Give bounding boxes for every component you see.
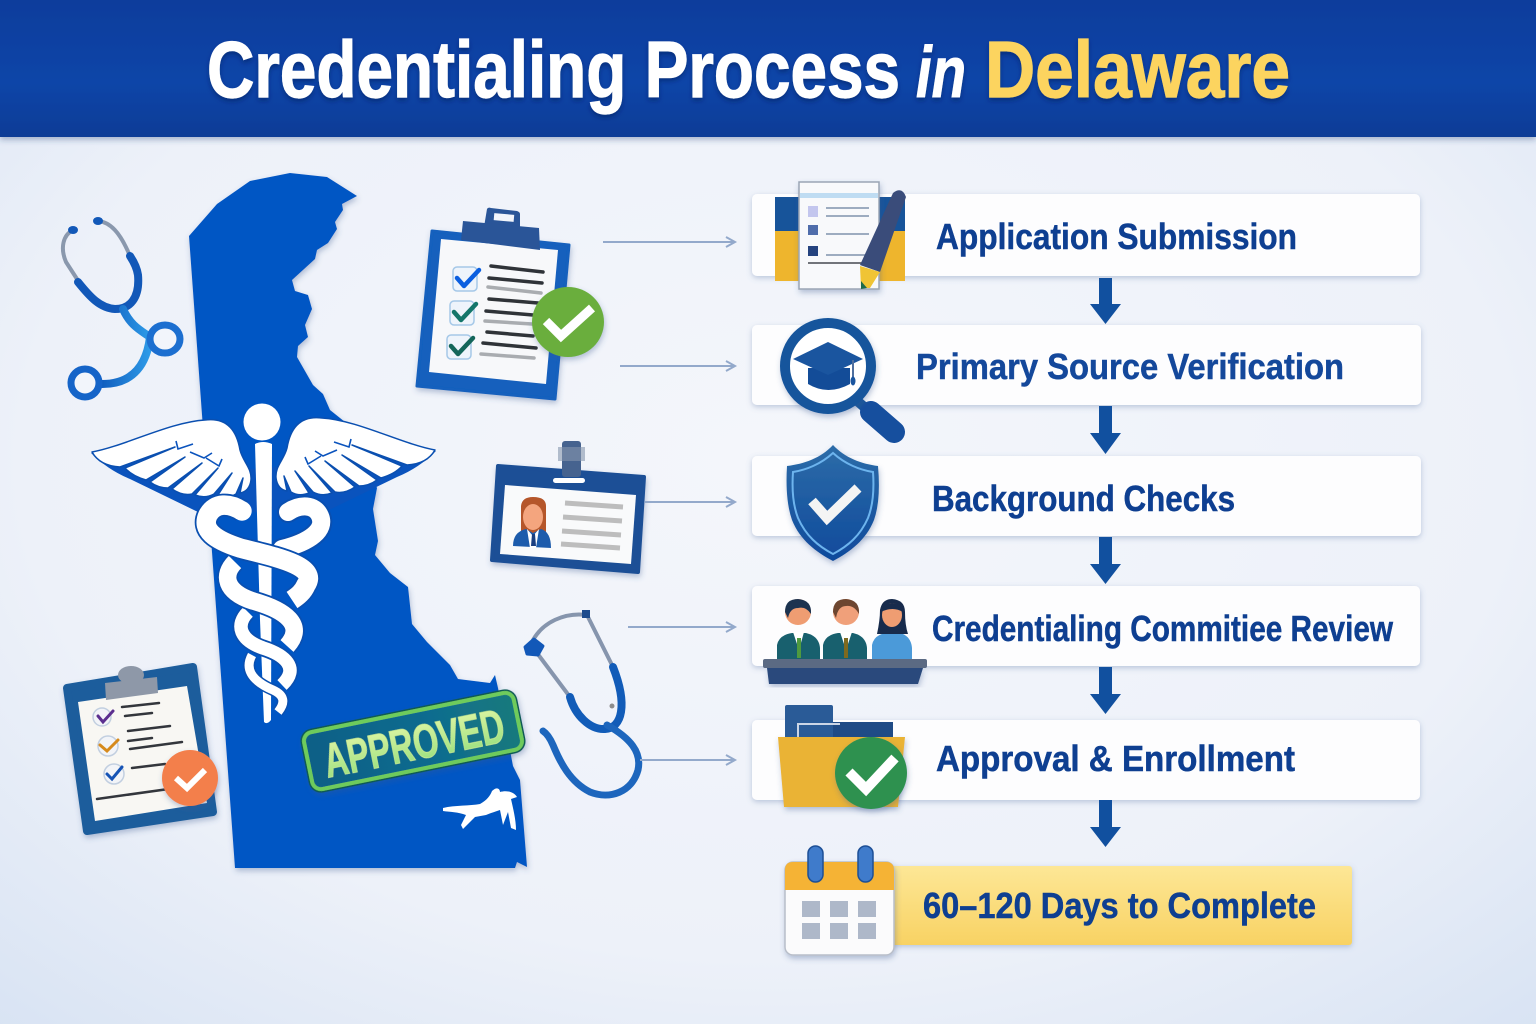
caduceus symbol (91, 404, 436, 723)
title: in (916, 33, 966, 113)
staff ball (244, 404, 280, 440)
callout bar (880, 866, 1352, 945)
icon: review panel (763, 599, 927, 684)
connector arrows (603, 237, 735, 765)
icon: orange check badge (162, 750, 218, 806)
icon: green check badge (532, 287, 604, 357)
step 2: primary source verification (785, 323, 1344, 432)
icon: ID badge (492, 441, 644, 572)
step 3: background checks (787, 445, 1235, 561)
title: Delaware (985, 25, 1290, 114)
label: Credentialing Commitiee Review (932, 608, 1394, 649)
icon: small clipboard (67, 666, 218, 831)
label: Application Submission (936, 216, 1297, 257)
timeline callout (785, 846, 1352, 955)
icon: white horse (443, 788, 517, 830)
title: Credentialing Process (207, 25, 900, 114)
approved stamp: APPROVED (319, 700, 509, 789)
step 4: credentialing committee review (763, 599, 1394, 684)
icon: checklist clipboard (417, 208, 604, 399)
icon: stethoscope left (63, 217, 180, 397)
label: 60–120 Days to Complete (923, 885, 1316, 926)
label: Primary Source Verification (916, 346, 1344, 387)
icon: magnifier with graduation cap (785, 323, 894, 432)
icon: stethoscope right (525, 610, 639, 795)
Delaware state map (189, 173, 527, 868)
label: Approval & Enrollment (936, 738, 1295, 779)
left wing (91, 420, 262, 512)
approved stamp (300, 689, 526, 793)
step 5: approval and enrollment (778, 705, 1295, 809)
header banner (0, 0, 1536, 137)
icon: application form (775, 182, 906, 289)
label: Background Checks (932, 478, 1235, 519)
step cards (752, 194, 1421, 800)
right wing (265, 418, 436, 510)
step 1: application submission (775, 182, 1297, 289)
flow arrows (1090, 278, 1121, 847)
icon: folder with check (778, 705, 907, 809)
serpents (206, 501, 321, 712)
icon: calendar (785, 846, 894, 955)
staff (255, 442, 272, 723)
icon: shield with check (787, 445, 879, 561)
